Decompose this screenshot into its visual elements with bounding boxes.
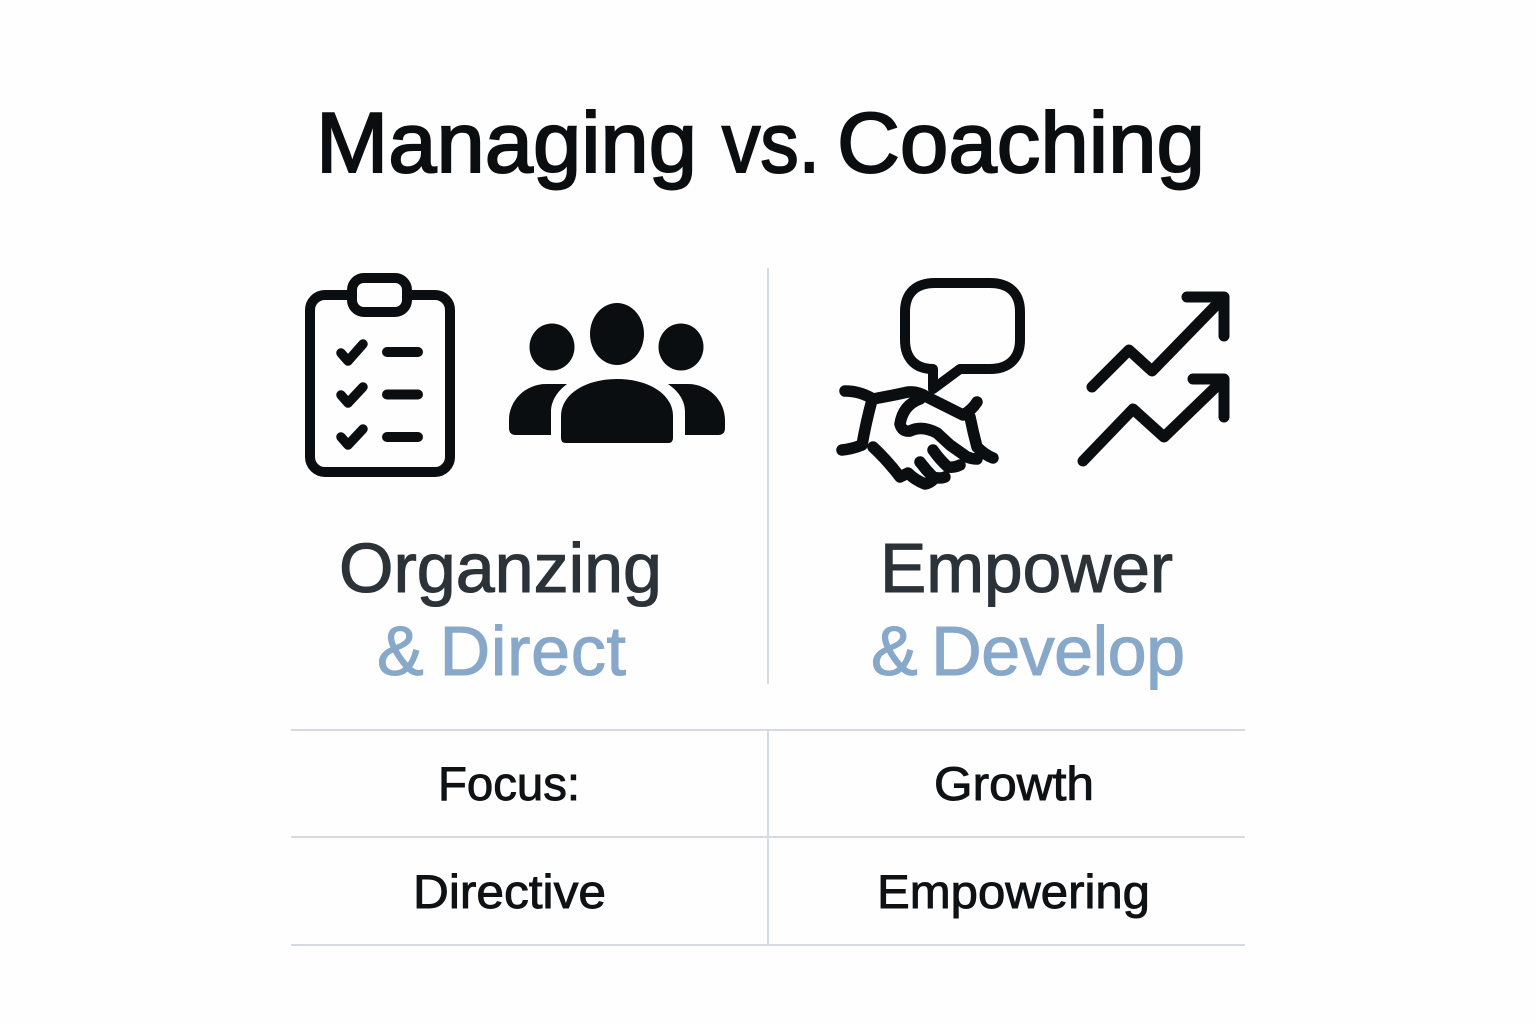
title: Managing: [316, 96, 697, 191]
panel: coaching: [842, 283, 1224, 690]
title: [316, 96, 1205, 191]
cell: focus: Focus:: [438, 757, 580, 810]
icon: team of three people: [509, 303, 725, 443]
heading: organizing and direct: Organzing: [339, 529, 662, 607]
heading: organizing and direct: & Direct: [377, 612, 626, 690]
title: vs.: [722, 96, 820, 191]
comparison table: [291, 730, 1245, 945]
title: Coaching: [837, 96, 1205, 191]
panel: managing: [310, 278, 725, 690]
cell: empowering: Empowering: [877, 865, 1150, 918]
icon: double growth arrows: [1083, 297, 1224, 461]
heading: organizing and direct: [339, 529, 662, 690]
heading: empower and develop: [871, 529, 1185, 690]
icon: handshake with speech bubble: [842, 283, 1020, 484]
cell: growth: Growth: [934, 757, 1094, 810]
heading: empower and develop: & Develop: [871, 612, 1185, 690]
heading: empower and develop: Empower: [880, 529, 1173, 607]
icon: clipboard checklist: [310, 278, 450, 472]
cell: directive: Directive: [413, 865, 606, 918]
